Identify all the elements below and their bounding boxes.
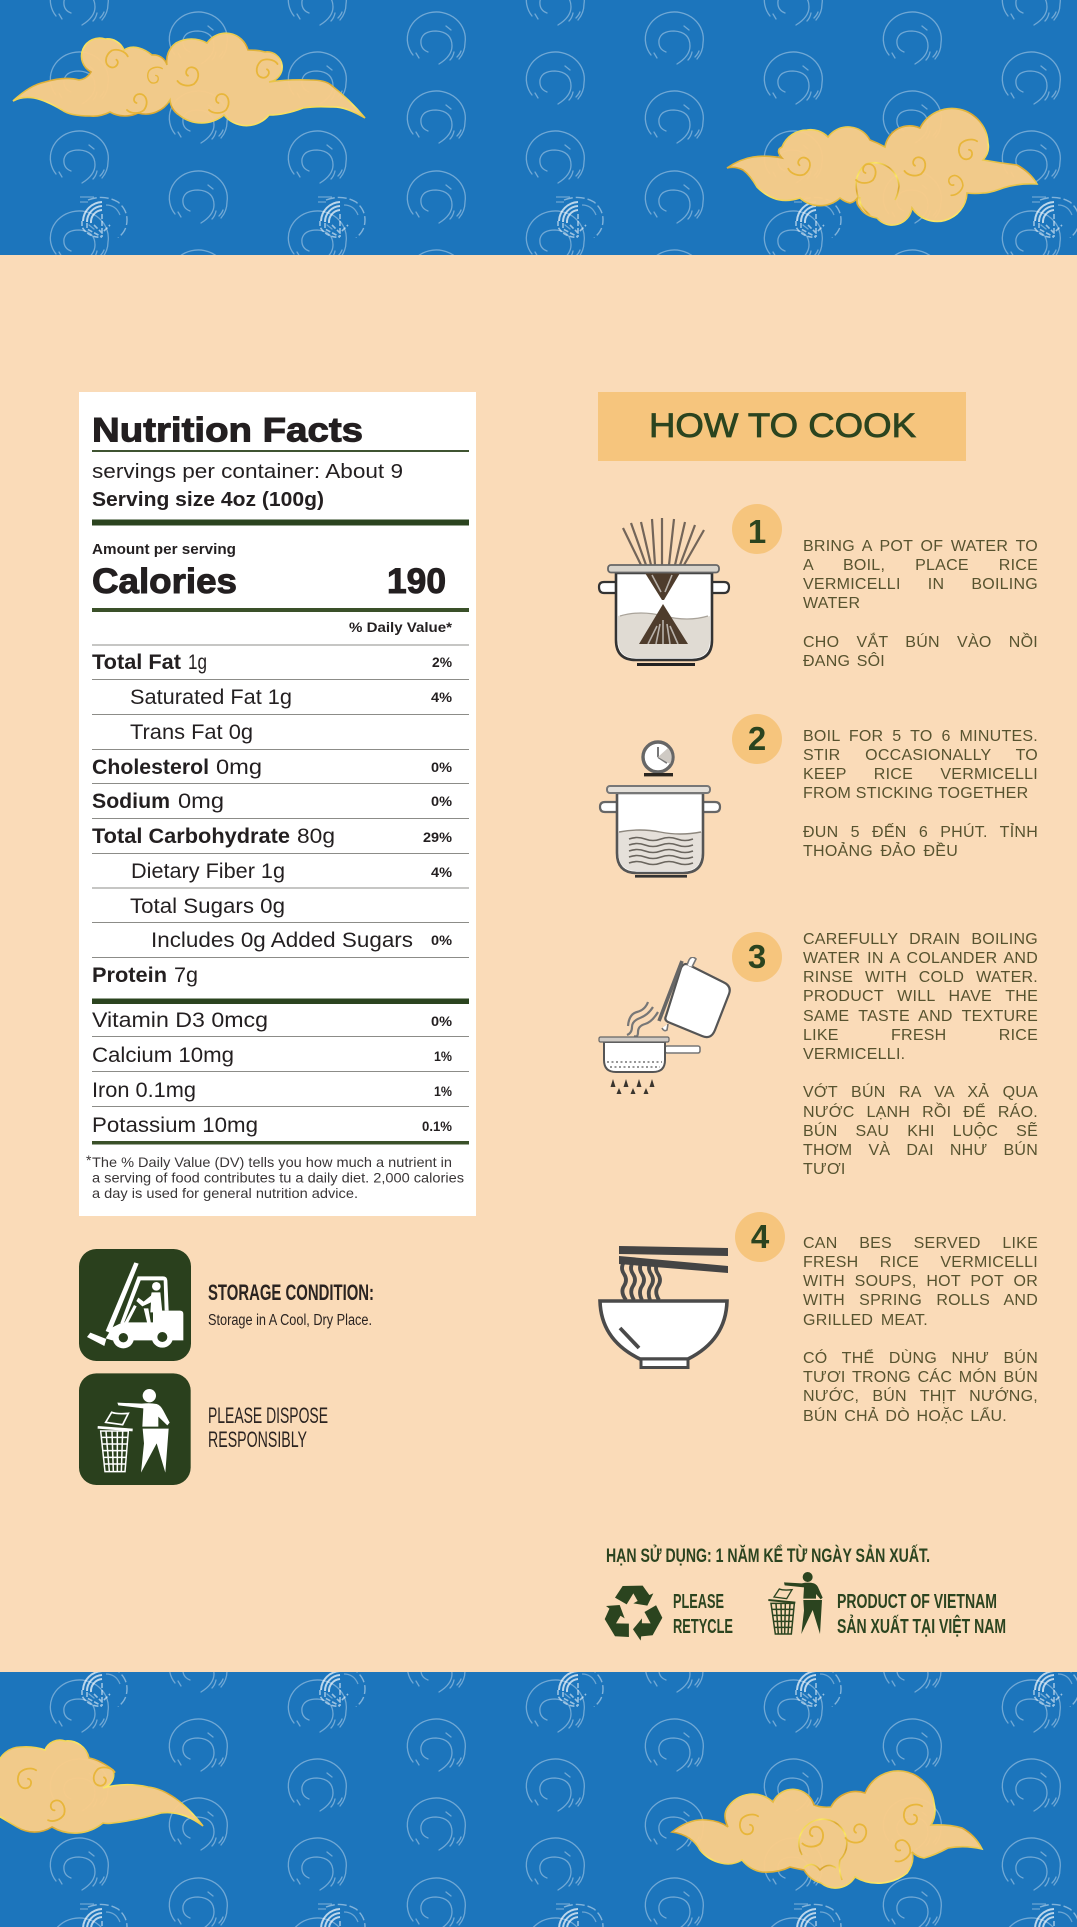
instructions: CHO VẮT BÚN VÀO NỒI xyxy=(803,634,1038,651)
nutrient rows: 29% xyxy=(423,829,453,845)
storage condition text xyxy=(208,1280,374,1329)
step 2 xyxy=(598,714,1038,878)
nutrient rows: Total Carbohydrate xyxy=(92,825,290,848)
dispose text: RESPONSIBLY xyxy=(208,1427,307,1452)
instructions: PRODUCT WILL HAVE THE xyxy=(803,988,1038,1005)
footnote xyxy=(86,1152,464,1201)
recycle text: PLEASE xyxy=(673,1591,724,1613)
nutrient rows: Sodium xyxy=(92,790,170,813)
nutrient rows: 0% xyxy=(431,759,453,775)
number badge: 1 xyxy=(748,513,766,550)
nutrient rows: 0% xyxy=(431,793,453,809)
serving information: Serving size 4oz (100g) xyxy=(92,488,324,511)
instructions: THƠM VÀ DAI NHƯ BÚN xyxy=(803,1142,1038,1159)
instructions: WATER IN A COLANDER AND xyxy=(803,950,1038,967)
recycle text xyxy=(673,1591,733,1638)
footer block: shelf life and origin xyxy=(604,1543,1006,1640)
instructions: WITH SPRING ROLLS AND xyxy=(803,1292,1038,1309)
icon: noodles in pot xyxy=(598,518,730,666)
icon: dispose in bin xyxy=(79,1373,191,1485)
instructions xyxy=(803,931,1038,1178)
serving information xyxy=(92,460,403,511)
instructions: CÓ THỂ DÙNG NHƯ BÚN xyxy=(803,1350,1038,1367)
nutrient rows: Dietary Fiber 1g xyxy=(131,860,285,883)
nutrient rows: Cholesterol xyxy=(92,756,209,779)
instructions: KEEP RICE VERMICELLI xyxy=(803,766,1038,783)
background pattern xyxy=(0,1672,1077,1927)
instructions: NƯỚC, BÚN THỊT NƯỚNG, xyxy=(803,1388,1038,1405)
calories: Amount per serving xyxy=(92,542,236,558)
daily value header: % Daily Value* xyxy=(349,619,453,635)
instructions: BÚN CHẢ DÒ HOẶC LẨU. xyxy=(803,1408,1007,1425)
step 4 xyxy=(598,1212,1038,1425)
calories: Calories xyxy=(92,562,237,601)
number badge xyxy=(735,1212,785,1262)
step 1 xyxy=(598,504,1038,670)
dispose text xyxy=(208,1403,328,1452)
cloud left xyxy=(13,33,365,126)
instructions: BRING A POT OF WATER TO xyxy=(803,538,1038,555)
instructions: WITH SOUPS, HOT POT OR xyxy=(803,1273,1038,1290)
instructions: THOẢNG ĐẢO ĐỀU xyxy=(803,843,958,860)
step 3 xyxy=(598,931,1038,1178)
instructions: CAREFULLY DRAIN BOILING xyxy=(803,931,1038,948)
panel: nutrition facts xyxy=(79,392,476,1216)
panel: how to cook heading: HOW TO COOK xyxy=(649,407,916,445)
number badge: 3 xyxy=(748,938,766,975)
nutrient rows: 2% xyxy=(432,654,453,670)
instructions: LIKE FRESH RICE xyxy=(803,1027,1038,1044)
instructions: VERMICELLI IN BOILING xyxy=(803,576,1038,593)
footnote: a day is used for general nutrition advice. xyxy=(92,1185,358,1201)
icon: pot with timer xyxy=(598,740,722,878)
instructions: ĐANG SÔI xyxy=(803,653,885,670)
instructions: A BOIL, PLACE RICE xyxy=(803,557,1038,574)
nutrient rows: Protein xyxy=(92,964,167,987)
instructions: ĐUN 5 ĐẾN 6 PHÚT. TỈNH xyxy=(803,824,1038,841)
footnote: a serving of food contributes tu a daily diet. 2,000 calories xyxy=(92,1170,464,1186)
nutrient rows: 0mg xyxy=(178,790,224,813)
nutrient rows xyxy=(92,651,453,987)
nutrient rows: 7g xyxy=(174,964,198,987)
instructions: RINSE WITH COLD WATER. xyxy=(803,969,1038,986)
instructions: BÚN SAU KHI LUỘC SẼ xyxy=(803,1123,1038,1140)
instructions: BOIL FOR 5 TO 6 MINUTES. xyxy=(803,728,1038,745)
vitamins and minerals: Calcium 10mg xyxy=(92,1044,234,1067)
instructions: WATER xyxy=(803,595,860,612)
cloud left xyxy=(0,1740,203,1833)
number badge xyxy=(732,504,782,554)
instructions xyxy=(803,538,1038,670)
footnote: * xyxy=(86,1152,92,1168)
number badge: 4 xyxy=(751,1218,769,1255)
vitamins and minerals: Potassium 10mg xyxy=(92,1114,258,1137)
nutrient rows: Saturated Fat 1g xyxy=(130,686,292,709)
icon: noodle bowl with chopsticks xyxy=(598,1246,729,1369)
icon: recycle xyxy=(599,1586,666,1644)
panel background xyxy=(79,392,476,1216)
instructions: FROM STICKING TOGETHER xyxy=(803,785,1028,802)
instructions: SAME TASTE AND TEXTURE xyxy=(803,1008,1038,1025)
instructions: FRESH RICE VERMICELLI xyxy=(803,1254,1038,1271)
nutrient rows: 0mg xyxy=(216,756,262,779)
number badge: 2 xyxy=(748,720,766,757)
instructions xyxy=(803,1235,1038,1425)
dispose text: PLEASE DISPOSE xyxy=(208,1403,328,1428)
footnote: The % Daily Value (DV) tells you how much a nutrient in xyxy=(92,1154,452,1170)
nutrient rows: Trans Fat 0g xyxy=(130,721,253,744)
instructions: VERMICELLI. xyxy=(803,1046,905,1063)
nutrient rows: 80g xyxy=(297,825,335,848)
background pattern xyxy=(0,0,1077,255)
vitamins and minerals: 0.1% xyxy=(422,1118,453,1134)
bottom banner xyxy=(0,1672,1077,1927)
storage and disposal block xyxy=(79,1249,374,1485)
nutrient rows: 0% xyxy=(431,932,453,948)
instructions: VỚT BÚN RA VA XẢ QUA xyxy=(803,1084,1038,1101)
nutrient rows: 1g xyxy=(188,651,207,674)
nutrient rows: Includes 0g Added Sugars xyxy=(151,929,413,952)
icon: draining into colander xyxy=(598,957,731,1094)
nutrient rows: Total Sugars 0g xyxy=(130,895,285,918)
number badge xyxy=(732,714,782,764)
cloud right xyxy=(672,1771,982,1888)
calories xyxy=(92,542,446,601)
number badge xyxy=(732,932,782,982)
vitamins and minerals: 1% xyxy=(434,1048,452,1064)
nutrient rows: 4% xyxy=(431,864,453,880)
vitamins and minerals xyxy=(92,1009,453,1137)
calories: 190 xyxy=(387,562,446,601)
instructions: CAN BES SERVED LIKE xyxy=(803,1235,1038,1252)
recycle text: RETYCLE xyxy=(673,1616,733,1638)
icon: forklift xyxy=(79,1249,191,1361)
instructions: GRILLED MEAT. xyxy=(803,1312,928,1329)
instructions: NƯỚC LẠNH RỒI ĐỂ RÁO. xyxy=(803,1104,1038,1121)
top banner xyxy=(0,0,1077,255)
panel: how to cook heading xyxy=(598,392,966,461)
nutrient rows: Total Fat xyxy=(92,651,181,674)
vitamins and minerals: 1% xyxy=(434,1083,452,1099)
instructions: TƯƠI xyxy=(803,1161,846,1178)
heading: nutrition facts: Nutrition Facts xyxy=(92,412,363,450)
origin text xyxy=(837,1591,1006,1638)
instructions xyxy=(803,728,1038,860)
cloud right xyxy=(727,108,1037,225)
instructions: TƯƠI TRONG CÁC MÓN BÚN xyxy=(803,1369,1038,1386)
instructions: STIR OCCASIONALLY TO xyxy=(803,747,1038,764)
vitamins and minerals: Vitamin D3 0mcg xyxy=(92,1009,268,1032)
vitamins and minerals: Iron 0.1mg xyxy=(92,1079,196,1102)
vitamins and minerals: 0% xyxy=(431,1013,453,1029)
nutrient rows: 4% xyxy=(431,689,453,705)
icon: dispose in bin xyxy=(768,1572,823,1634)
serving information: servings per container: About 9 xyxy=(92,460,403,483)
